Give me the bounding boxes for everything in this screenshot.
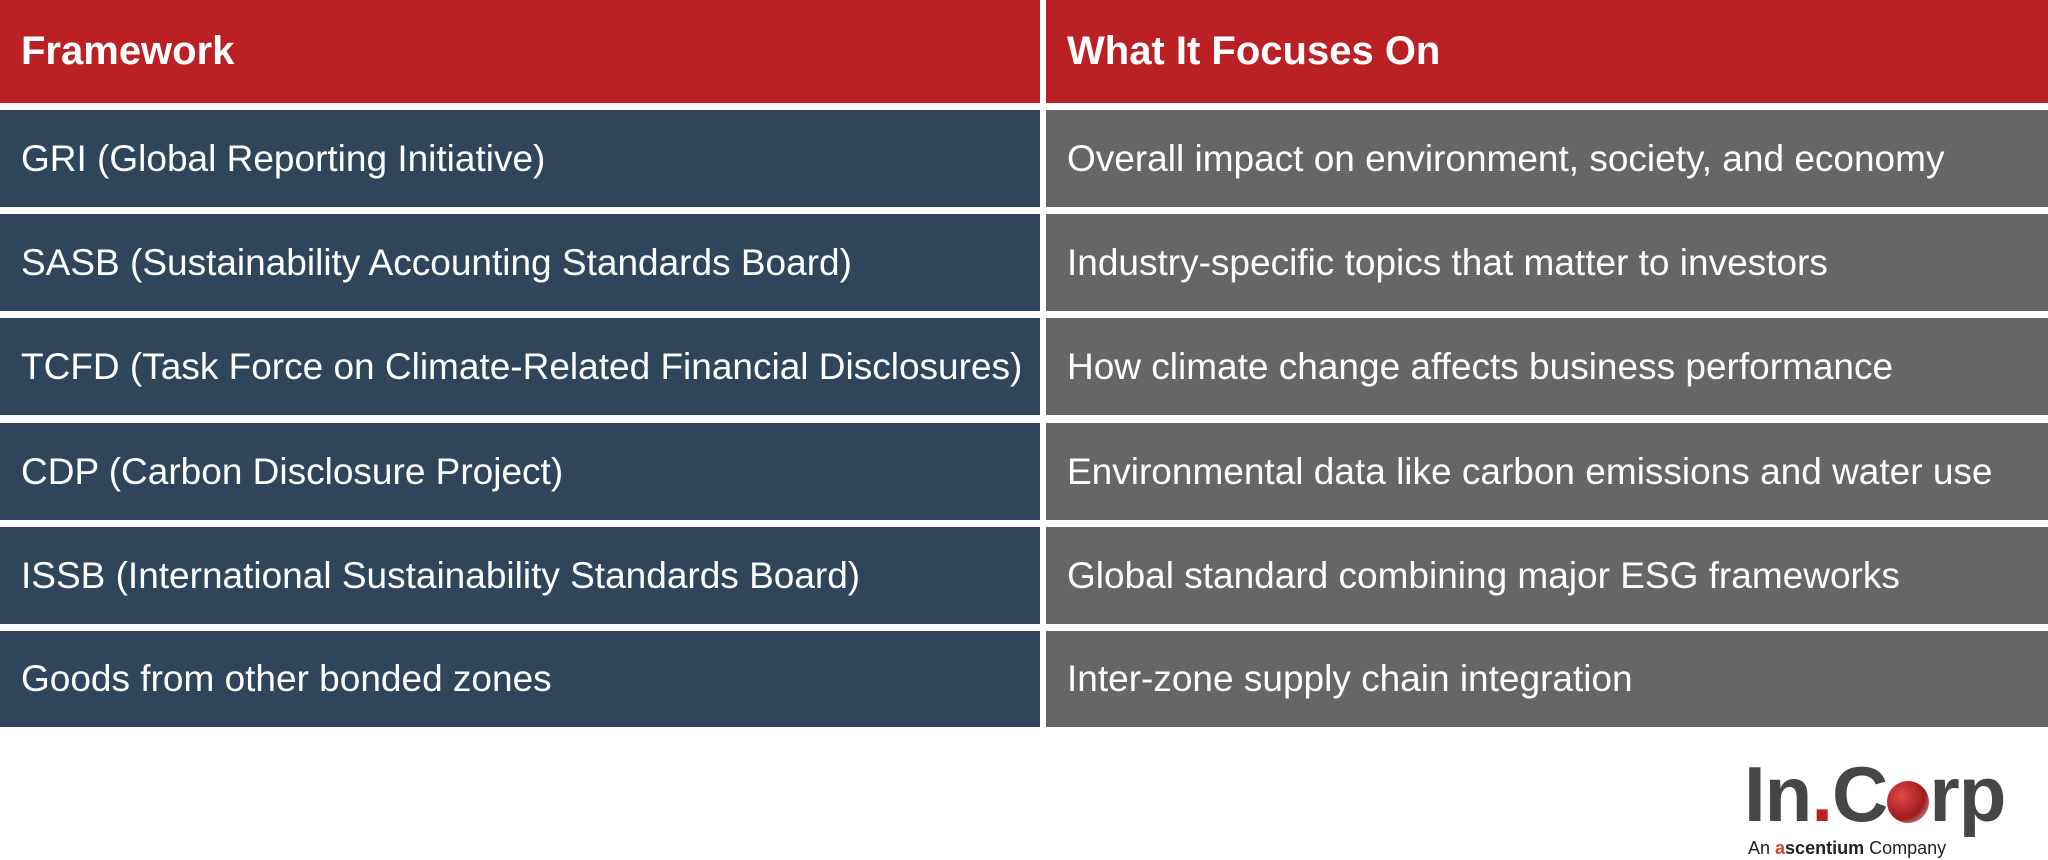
row: GRI: GRI (Global Reporting Initiative) (21, 138, 545, 178)
row: GRI: Overall impact on environment, society, and economy (1067, 138, 1944, 178)
logo wordmark: In.C rp (1744, 750, 2005, 838)
table header (0, 0, 2048, 103)
row: ISSB: Global standard combining major ESG frameworks (1067, 554, 1900, 596)
row: ISSB (0, 527, 2048, 624)
logo: InCorp (1744, 750, 2005, 858)
row: CDP: Environmental data like carbon emissions and water use (1067, 450, 1992, 492)
logo tagline: An ascentium Company (1748, 838, 1946, 858)
row: SASB: SASB (Sustainability Accounting Standards Board) (21, 242, 852, 282)
row: TCFD: How climate change affects business performance (1067, 346, 1893, 386)
row: SASB (0, 214, 2048, 311)
row: ISSB: ISSB (International Sustainability Standards Board) (21, 554, 860, 596)
row: GRI (0, 110, 2048, 207)
row: TCFD: TCFD (Task Force on Climate-Related Financial Disclosures) (21, 346, 1022, 386)
header: What It Focuses On (1046, 0, 2048, 103)
row: bonded zones (0, 631, 2048, 727)
header: Framework (0, 0, 1040, 103)
row: CDP: CDP (Carbon Disclosure Project) (21, 450, 563, 492)
header: What It Focuses On: What It Focuses On (1067, 29, 1440, 73)
row: SASB: Industry-specific topics that matter to investors (1067, 242, 1828, 282)
row: bonded zones: Inter-zone supply chain integration (1067, 658, 1633, 699)
row: bonded zones: Goods from other bonded zones (21, 658, 552, 699)
row: TCFD (0, 318, 2048, 415)
header: Framework: Framework (21, 29, 234, 73)
row: CDP (0, 423, 2048, 520)
